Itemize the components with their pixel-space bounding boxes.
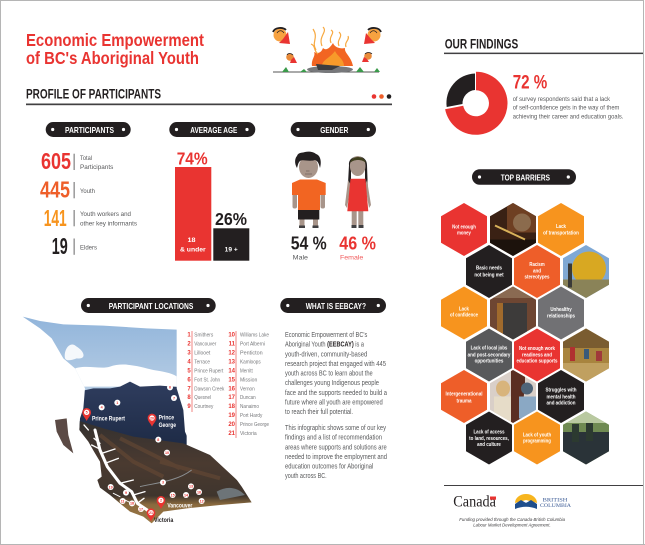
funding note [459,517,565,527]
stat: 72 percent text [513,72,624,120]
text block: about EEBCAY: This infographic shows some of our key [285,425,386,432]
icon: raven small right [362,52,372,62]
hex: racism and stereotypes: Racism [529,262,545,268]
text block: about EEBCAY: face and the supports needed to build a [285,390,387,397]
stat: female 46 percent: Female [340,255,364,262]
map location markers: 3 [162,481,164,485]
pin: Prince George: 20 [150,416,154,420]
hex: not enough work readiness: Not enough work [519,346,555,352]
hex: struggles with mental health: and addiction [546,400,576,406]
stat: 141 youth workers: 141 [44,205,67,231]
hex: lack of transportation [538,203,584,256]
map location markers: 12 [200,499,204,503]
hex: basic needs: Basic needs [476,266,502,272]
legend: location list: 11 [229,342,236,348]
hex: basic needs [466,245,512,298]
legend: location list: 15 [228,377,236,383]
legend: location list: 5 [187,368,191,374]
photo hex: forest gathering [562,411,610,465]
hex: intergenerational trauma: Intergenerational [446,392,483,398]
hex: lack of local jobs: and post-secondary [468,352,510,358]
hex: lack of local jobs: opportunities [475,358,503,364]
text block: about EEBCAY: youth across BC. [285,473,327,480]
stat: 72 percent text: of self-confidence gets in the way of them [513,105,619,112]
hex: lack of access to land [466,412,512,464]
legend: location list: Port Alberni [240,342,265,348]
map location markers: 19 [109,485,113,489]
pill: participants [46,122,131,137]
photo hex: community meeting [562,328,610,382]
bar: 19 and over [213,209,249,261]
logo: British Columbia: BRITISH [543,497,567,503]
legend: location list: 12 [228,351,236,357]
hex: lack of youth programming [514,412,560,464]
pin: Victoria [147,508,174,524]
text block: about EEBCAY: areas where supports and solutions are [285,444,387,451]
pin: Vancouver: Vancouver [167,502,193,509]
legend: location list: Williams Lake [240,333,269,339]
hex: struggles with mental health: mental health [546,394,576,400]
title [26,30,204,68]
hex: racism and stereotypes: and [533,268,541,274]
hex: intergenerational trauma: trauma [456,398,472,404]
stat: female 46 percent [339,232,376,262]
heading: profile of participants [26,87,392,105]
hex: lack of confidence [441,286,487,340]
hex: lack of local jobs [466,328,512,382]
hex: lack of access to land: and culture [477,442,501,448]
map location markers: 18 [130,502,134,506]
map location markers: 9 [125,491,127,495]
bar: 18 and under: & under [180,247,206,254]
icon: raven large right [364,28,381,44]
stat: 141 youth workers: other key informants [80,221,137,228]
legend: location list: 18 [228,404,236,410]
map location markers [99,384,205,512]
title: of BC's Aboriginal Youth [26,48,199,68]
hex: lack of transportation: of transportation [543,231,579,237]
legend: location list: Prince George [240,422,269,428]
map location markers: 11 [121,499,125,503]
map location markers: 8 [157,438,159,442]
map location markers: 1 [116,401,118,405]
hex: not enough money: money [457,231,471,237]
legend: location list: Vancouver [194,342,216,348]
legend: location list: Victoria [240,431,257,437]
legend: location list [187,331,269,438]
pill: participants: PARTICIPANTS [65,125,114,135]
hex: lack of access to land: to land, resources, [469,436,509,442]
hex: basic needs: not being met [474,272,504,278]
pin: Victoria: 21 [149,511,153,515]
pill: top barriers: TOP BARRIERS [501,173,550,183]
legend: location list: 7 [187,386,191,392]
pin: Prince George: George [159,422,176,429]
hex: lack of local jobs: Lack of local jobs [471,346,507,352]
bar: 19 and over: 19 + [225,247,238,254]
stat: male 54 percent [291,232,327,262]
title: Economic Empowerment [26,30,204,50]
text block: about EEBCAY: needed to improve the employment and [285,454,387,461]
stat: 605 total participants: 605 [41,148,71,174]
stat: male 54 percent: Male [293,255,308,262]
heading: profile of participants: PROFILE OF PARTICIPANTS [26,87,161,102]
pin: Prince Rupert: 5 [86,411,88,415]
stat: 605 total participants [41,148,113,174]
illustration: campfire with ravens [273,27,381,73]
legend: location list: 19 [228,413,236,419]
icon: raven large left [273,28,290,44]
map location markers: 16 [197,490,201,494]
legend: location list: 17 [228,395,236,401]
hex: unhealthy relationships: relationships [547,313,575,319]
legend: location list: 2 [187,342,191,348]
text block: about EEBCAY: research project that engaged with 445 [285,361,386,368]
stat: 19 elders [52,233,97,259]
legend: location list: Nanaimo [240,404,259,410]
pill: gender: GENDER [320,125,348,135]
stat: 19 elders: Elders [80,245,97,252]
stat: 445 youth [40,177,95,203]
pin: Prince Rupert: Prince Rupert [92,415,126,422]
legend: location list: Terrace [194,360,210,366]
hex: struggles with mental health: Struggles with [546,388,576,394]
legend: location list: Mission [240,377,257,383]
stat: 141 youth workers: Youth workers and [80,211,131,218]
legend: location list: 14 [228,368,236,374]
legend: location list: 16 [228,386,236,392]
stat: 141 youth workers [44,205,137,231]
stat: 72 percent text: of survey respondents said that a lack [513,96,611,103]
hex: not enough work readiness: readiness and [522,352,552,358]
logo: Canada: Canada [453,494,496,511]
donut chart: 72 percent [445,72,508,135]
fjords and coastal straits [84,425,151,512]
bar: 18 and under: 18 [188,237,196,244]
legend: location list: 4 [187,360,191,366]
text block: about EEBCAY: findings and a list of recommendation [285,435,382,442]
photo hex: carved door [489,286,537,340]
figure: female [345,156,371,228]
map location markers: 4 [101,406,104,410]
pill: gender [291,122,376,137]
text block: about EEBCAY: challenges young Indigenous people [285,380,379,387]
text block: about EEBCAY: to reach their full potential. [285,409,353,416]
legend: location list: Penticton [240,351,263,357]
text block: about EEBCAY: Economic Empowerment of BC's [285,332,368,339]
photo hex: feather [489,202,537,256]
legend: location list: 9 [187,404,191,410]
legend: location list: Quesnel [194,395,211,401]
bar chart: average age [175,148,249,261]
hex: lack of confidence: of confidence [450,313,478,319]
hexagon grid: top barriers [441,202,610,465]
legend: location list: 6 [187,377,191,383]
logo: British Columbia: COLUMBIA [540,503,571,509]
icon: raven small left [286,53,297,63]
hex: lack of youth programming: Lack of youth [523,433,551,439]
legend: location list: Lillooet [194,351,211,357]
pill: what is EEBCAY [280,298,386,313]
stat: 605 total participants: Total [80,155,92,162]
funding note: Labour Market Development Agreement. [473,522,551,527]
map location markers: 10 [165,451,169,455]
pill: what is EEBCAY: WHAT IS EEBCAY? [306,301,366,311]
pin: Prince George [148,414,176,429]
bar: 18 and under: 74% [177,148,208,168]
logo: British Columbia [515,494,571,509]
legend: location list: 10 [228,333,236,339]
pill: participant locations [81,298,216,313]
pin: Victoria: Victoria [154,517,174,524]
legend: location list: Fort St. John [194,377,220,383]
legend: location list: Vernon [240,386,255,392]
text block: about EEBCAY: future where all youth are empowered [285,399,383,406]
stat: male 54 percent: 54 % [291,232,327,253]
photo hex: autumn tree [562,244,610,298]
Haida Gwaii [55,418,73,453]
hex: unhealthy relationships [538,286,584,340]
hex: lack of youth programming: programming [523,439,551,445]
bar: 19 and over: 26% [215,209,247,229]
stat: 605 total participants: Participants [80,164,113,171]
photo hex: two people talking [489,370,537,424]
hex: racism and stereotypes: stereotypes [524,275,550,281]
map location markers: 6 [169,386,171,390]
legend: location list: 8 [187,395,191,401]
stat: 72 percent text: 72 % [513,72,547,94]
legend: location list: Port Hardy [240,413,262,419]
legend: location list: 20 [228,422,236,428]
stat: 445 youth: Youth [80,188,95,195]
pin: Prince Rupert [82,408,126,422]
stat: female 46 percent: 46 % [339,232,376,253]
legend: location list: Dawson Creek [194,386,224,392]
hex: unhealthy relationships: Unhealthy [550,307,572,313]
legend: location list: Kamloops [240,360,261,366]
stat: 19 elders: 19 [52,233,68,259]
stat: 72 percent text: achieving their career and education goals. [513,113,624,120]
hex: not enough money: Not enough [452,224,476,230]
legend: location list: Courtney [194,404,213,410]
legend: location list: Merritt [240,368,253,374]
hex: intergenerational trauma [441,370,487,423]
pin: Vancouver [157,496,193,509]
stat: 445 youth: 445 [40,177,70,203]
pill: top barriers [472,169,576,185]
pin: Prince George: Prince [159,415,174,422]
hex: not enough money [441,203,487,256]
hex: lack of transportation: Lack [556,224,566,230]
map location markers: 14 [184,493,189,497]
map location markers: 13 [189,485,193,489]
funding note: Funding provided through the Canada-British Columbia [459,517,565,522]
pin: Vancouver: 2 [160,499,162,503]
legend: location list: Duncan [240,395,256,401]
footer rule [444,485,643,486]
panel: participant counts [40,148,137,259]
text block: about EEBCAY: education outcomes for Aboriginal [285,464,374,470]
hex: not enough work readiness [514,328,560,382]
legend: location list: 3 [187,351,191,357]
hex: not enough work readiness: education supports [516,359,558,365]
heading: our findings: OUR FINDINGS [445,35,518,51]
pill: average age: AVERAGE AGE [190,125,238,135]
text block: about EEBCAY: youth-driven, community-based [285,351,367,358]
map location markers: 17 [139,507,143,511]
legend: location list: Prince Rupert [194,368,224,374]
text block: about EEBCAY: youth across BC to learn about the [285,370,373,378]
figure: male [292,152,326,228]
bar: 18 and under [175,148,211,261]
hex: racism and stereotypes [514,245,560,298]
legend: location list: 13 [228,360,236,366]
map location markers: 7 [173,396,175,400]
hex: lack of access to land: Lack of access [474,430,505,436]
text block: about EEBCAY: Aboriginal Youth (EEBCAY) is a [285,342,364,349]
map location markers: 15 [171,493,175,497]
hex: lack of confidence: Lack [459,307,469,313]
legend: location list: 21 [228,431,236,437]
legend: location list: 1 [187,333,191,339]
legend: location list: Smithers [194,333,213,339]
pill: participant locations: PARTICIPANT LOCATIONS [109,301,194,311]
pill: average age [169,122,255,137]
text block: about EEBCAY [285,332,387,480]
map: British Columbia [20,312,260,528]
hex: struggles with mental health [538,370,584,423]
